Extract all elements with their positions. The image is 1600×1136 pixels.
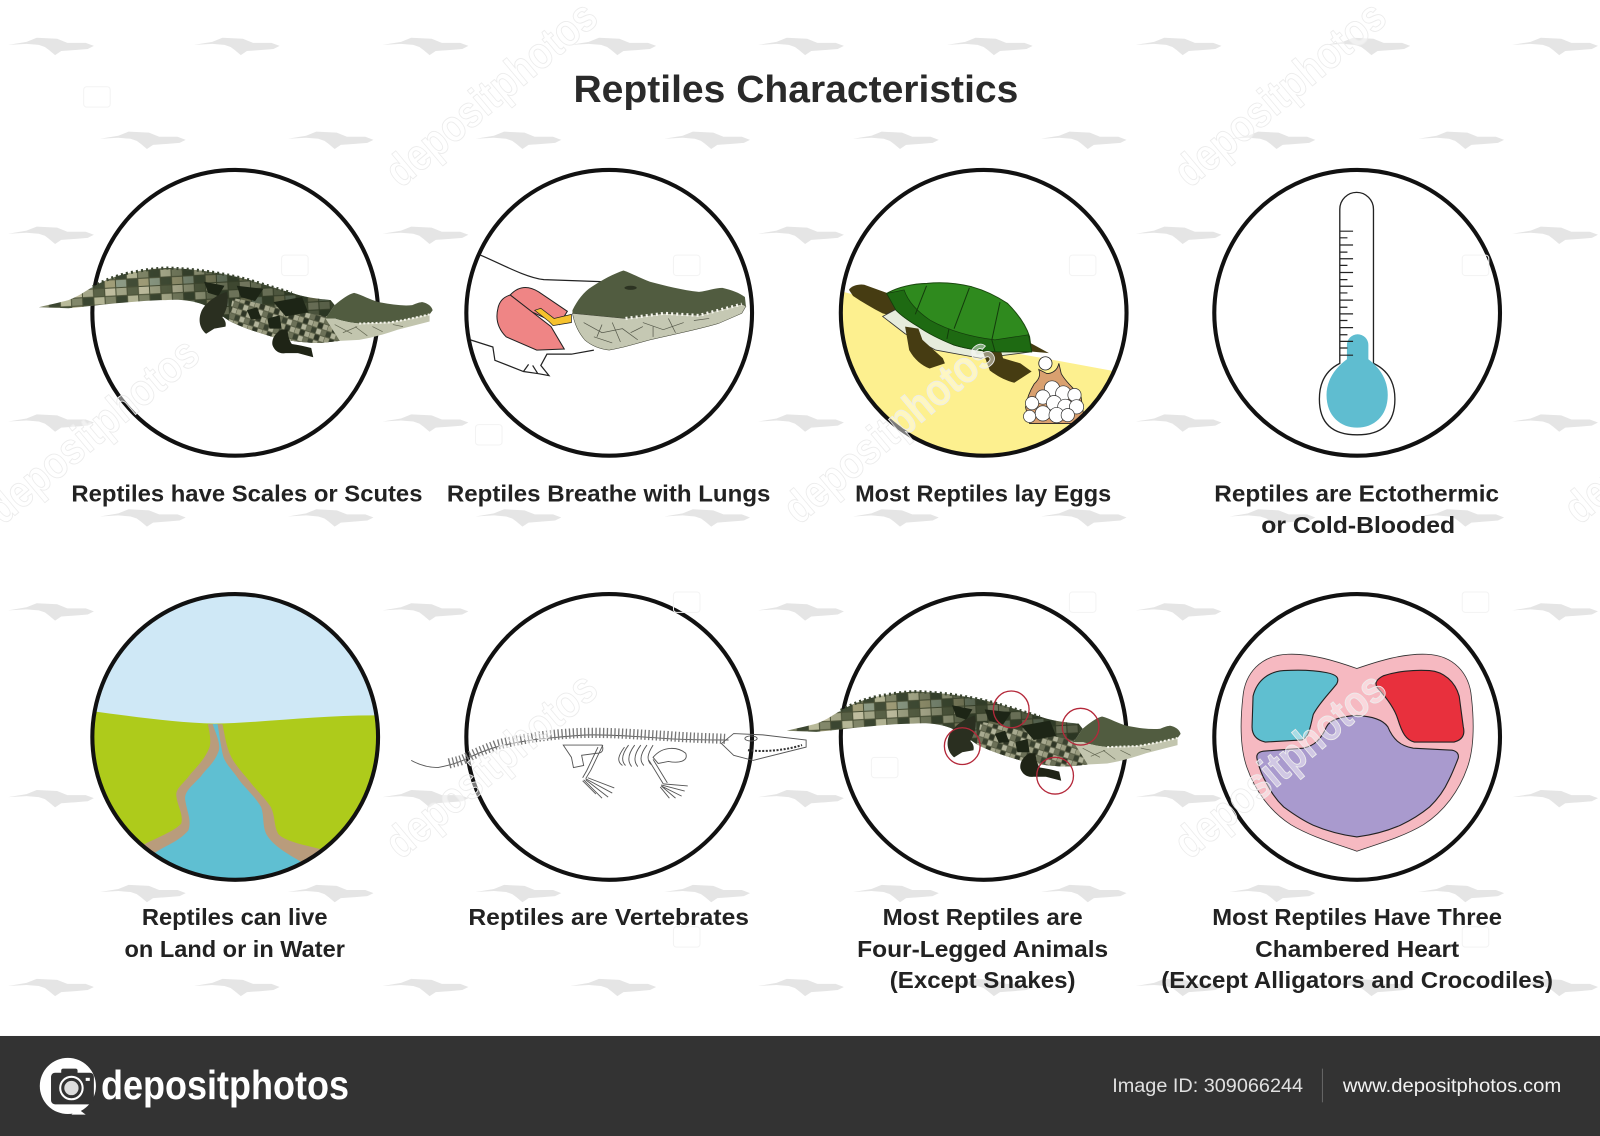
- illustration: skeleton: [411, 733, 806, 798]
- illustration: left atrium: [1376, 670, 1464, 742]
- icon: camera: [40, 1058, 96, 1115]
- illustration: body outline: [470, 255, 604, 376]
- illustration: heart wall: [1241, 654, 1473, 851]
- illustration: lungs: [497, 287, 567, 350]
- panel: ectothermic: [1214, 170, 1500, 538]
- caption: heart: Chambered Heart: [1255, 936, 1459, 962]
- panel: scales or scutes: [39, 170, 433, 507]
- panel: three chambered heart: [1161, 594, 1553, 993]
- illustration: crocodile: [787, 692, 1181, 781]
- panel: land or water: [87, 594, 384, 962]
- caption: ectothermic: Reptiles are Ectothermic: [1214, 481, 1499, 507]
- watermark overlay: depositphotos: [773, 327, 1005, 533]
- wordmark: depositphotos: [101, 1062, 349, 1108]
- logo: depositphotos: [40, 1058, 349, 1115]
- caption: ectothermic: [1214, 481, 1499, 538]
- illustration: ventricle: [1257, 715, 1458, 837]
- title: Reptiles Characteristics: [573, 68, 1018, 110]
- illustration: right atrium: [1252, 670, 1338, 742]
- caption: scales: Reptiles have Scales or Scutes: [71, 481, 422, 507]
- caption: four legged: Most Reptiles are: [883, 904, 1083, 930]
- illustration: river: [155, 724, 301, 878]
- caption: heart: (Except Alligators and Crocodiles): [1161, 967, 1553, 993]
- caption: four legged: (Except Snakes): [890, 967, 1076, 993]
- caption: heart: Most Reptiles Have Three: [1212, 904, 1502, 930]
- image id: Image ID: 309066244: [1112, 1075, 1303, 1097]
- caption: four legged: [857, 904, 1108, 993]
- illustration: land: [94, 712, 376, 850]
- panel: lay eggs: [832, 170, 1133, 507]
- website url: www.depositphotos.com: [1342, 1075, 1561, 1097]
- illustration: sand: [842, 292, 1112, 454]
- illustration: river banks: [144, 724, 320, 862]
- illustration: scaled crocodile: [39, 268, 433, 357]
- markers: red leg circles: [944, 691, 1099, 794]
- footer bar: [0, 1036, 1600, 1136]
- caption: lungs: Reptiles Breathe with Lungs: [447, 481, 770, 507]
- caption: ectothermic: or Cold-Blooded: [1261, 512, 1455, 538]
- panel: four legs: [787, 594, 1181, 993]
- illustration: crocodile head: [572, 270, 746, 350]
- illustration: egg nest: [1023, 357, 1084, 424]
- panel: breathe with lungs: [447, 170, 770, 507]
- caption: heart: [1161, 904, 1553, 993]
- caption: vertebrates: Reptiles are Vertebrates: [468, 904, 749, 930]
- watermark overlay: depositphotos: [375, 662, 607, 868]
- panel: vertebrates: [411, 594, 806, 930]
- caption: four legged: Four-Legged Animals: [857, 936, 1108, 962]
- icon: thermometer: [1319, 192, 1395, 435]
- caption: land or water: [124, 904, 345, 962]
- watermark overlay: depositphotos: [1163, 662, 1396, 868]
- illustration: trachea: [535, 308, 571, 326]
- caption: eggs: Most Reptiles lay Eggs: [855, 481, 1111, 507]
- caption: land or water: Reptiles can live: [142, 904, 328, 930]
- caption: land or water: on Land or in Water: [124, 936, 345, 962]
- illustration: turtle: [849, 283, 1049, 383]
